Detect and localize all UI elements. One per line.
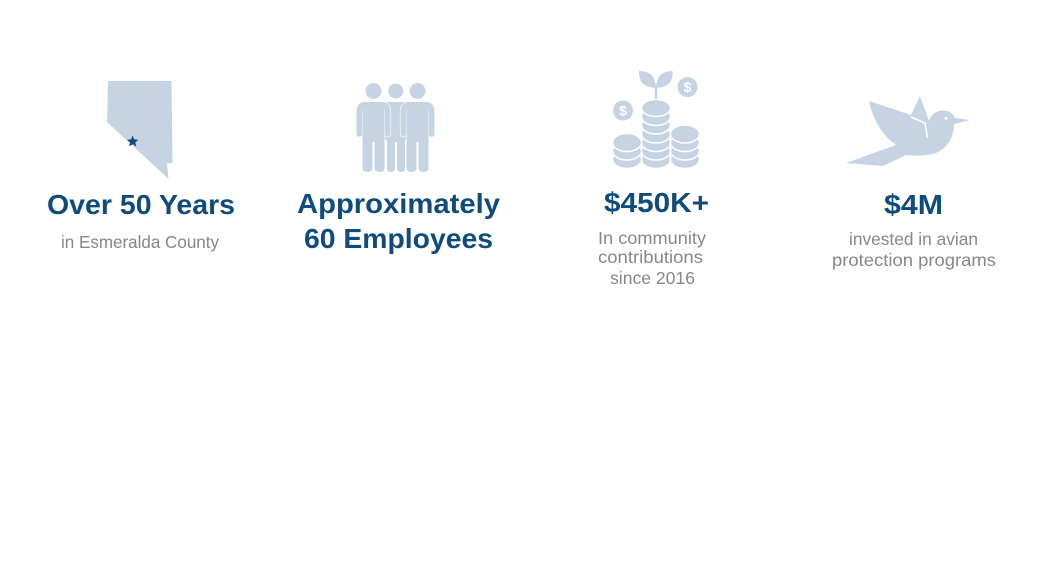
- text: In community contributions since 2016: In community: [598, 228, 706, 248]
- panel: years in Esmeralda County: [47, 81, 235, 252]
- icon: bird: [846, 96, 970, 166]
- icon: coin stacks with sprout: [612, 71, 700, 168]
- heading: Approximately 60 Employees: 60 Employees: [304, 223, 493, 254]
- text: invested in avian protection programs: protection programs: [832, 250, 996, 270]
- icon: coin stacks with sprout: $: [619, 102, 627, 118]
- text: In community contributions since 2016: since 2016: [610, 268, 695, 288]
- heading: Approximately 60 Employees: Approximately: [297, 188, 500, 219]
- text: In community contributions since 2016: contributions: [598, 247, 703, 267]
- text: invested in avian protection programs: [832, 229, 996, 270]
- text: in Esmeralda County: in Esmeralda County: [61, 232, 219, 252]
- text: invested in avian protection programs: invested in avian: [849, 229, 978, 249]
- text: In community contributions since 2016: [598, 228, 706, 288]
- panel: community contributions: [598, 71, 709, 288]
- icon: Nevada map with star: [107, 81, 172, 179]
- heading: Approximately 60 Employees: [297, 188, 500, 254]
- panel: employees: [297, 83, 500, 254]
- panel: avian protection: [832, 96, 996, 270]
- heading: $4M: $4M: [884, 189, 943, 220]
- icon: three people: [356, 83, 434, 172]
- heading: $450K+: $450K+: [604, 187, 709, 218]
- heading: Over 50 Years: Over 50 Years: [47, 189, 235, 220]
- icon: coin stacks with sprout: $: [684, 79, 692, 95]
